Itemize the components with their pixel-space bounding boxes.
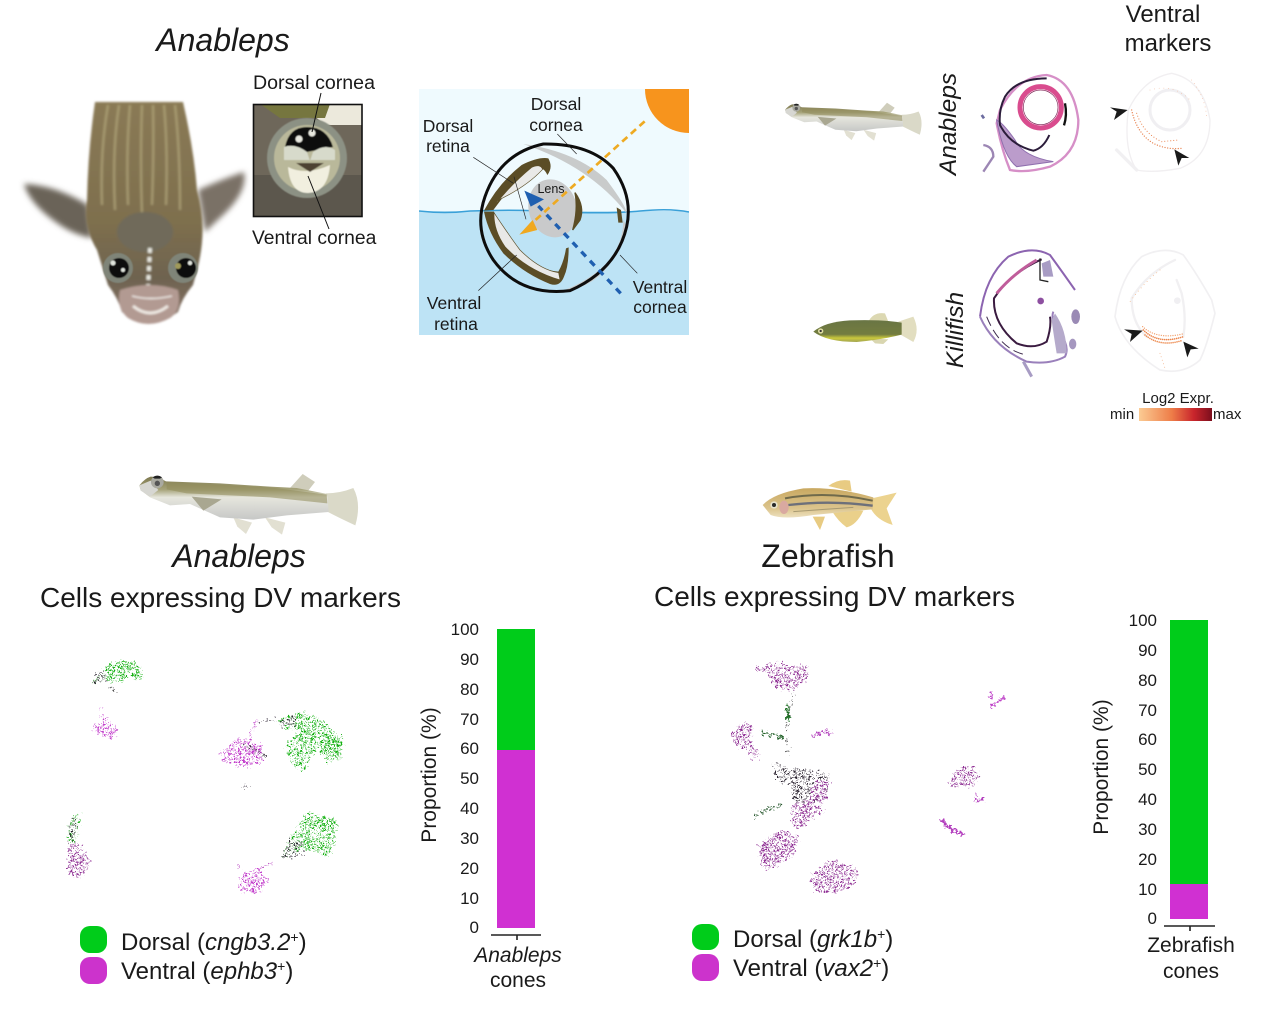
legend: Anableps dorsal and ventral: )	[285, 958, 293, 985]
legend: Anableps dorsal and ventral: Dorsal (cngb3.2	[121, 929, 290, 956]
chart: Zebrafish proportion stacked bar: 30	[1138, 820, 1157, 839]
x label: Anableps	[472, 944, 562, 967]
label: Dorsal cornea: Dorsal cornea	[253, 72, 375, 94]
legend: Anableps dorsal and ventral: +	[277, 958, 285, 974]
chart: Zebrafish proportion stacked bar: 60	[1138, 730, 1157, 749]
chart: Zebrafish proportion stacked bar: 90	[1138, 641, 1157, 660]
legend: Log2 expression colour bar: Log2 Expr.	[1142, 390, 1214, 407]
lens	[522, 174, 583, 243]
chart: Zebrafish proportion stacked bar: 0	[1148, 909, 1157, 928]
chart: Anableps proportion stacked bar: 10	[460, 889, 479, 908]
icon: arrowheads Anableps	[1110, 107, 1189, 166]
icon: killifish	[813, 313, 917, 344]
photo inset: eye close-up with cornea labels	[252, 72, 377, 249]
scatter: Anableps UMAP	[67, 660, 344, 893]
label: Ventral retina: Ventral	[427, 293, 481, 313]
chart: Zebrafish proportion stacked bar: 50	[1138, 760, 1157, 779]
legend: Zebrafish dorsal and ventral: Ventral (vax2	[733, 955, 873, 982]
chart: Anableps proportion stacked bar: 50	[460, 769, 479, 788]
chart: Anableps proportion stacked bar: 60	[460, 739, 479, 758]
ventral retina	[484, 212, 569, 285]
x label: cones	[490, 969, 546, 992]
heading: Cells expressing DV markers left: Cells expressing DV markers	[40, 582, 401, 613]
label: Anableps rotated: Anableps	[935, 73, 962, 177]
chart: Anableps proportion stacked bar	[418, 620, 562, 992]
label: Ventral retina: retina	[434, 314, 478, 334]
label: Ventral cornea diagram: Ventral	[633, 277, 687, 297]
title: Anableps top left: Anableps	[154, 22, 290, 58]
dorsal retina	[484, 158, 551, 211]
chart: Anableps proportion stacked bar: 90	[460, 650, 479, 669]
chart: Zebrafish proportion stacked bar	[1090, 611, 1235, 983]
label: Dorsal retina: retina	[426, 136, 470, 156]
section: Killifish histology	[980, 250, 1080, 377]
chart: Zebrafish proportion stacked bar: 20	[1138, 850, 1157, 869]
legend: Anableps dorsal and ventral: Ventral (ephb3	[121, 958, 277, 985]
chart: Zebrafish proportion stacked bar: 10	[1138, 880, 1157, 899]
heading: Cells expressing DV markers right: Cells expressing DV markers	[654, 581, 1015, 612]
heading: Ventral markers: Ventral	[1126, 1, 1200, 28]
x label: Zebrafish	[1147, 934, 1235, 957]
section: Anableps expression map	[1117, 73, 1210, 171]
label: Killifish rotated: Killifish	[942, 292, 969, 368]
legend: Zebrafish dorsal and ventral: )	[881, 955, 889, 982]
heading: Ventral markers: markers	[1125, 30, 1211, 57]
chart: Zebrafish proportion stacked bar: 70	[1138, 701, 1157, 720]
chart: Anableps proportion stacked bar: 100	[451, 620, 479, 639]
icon: fish pectoral fins	[24, 172, 245, 238]
legend: Anableps dorsal and ventral: +	[290, 929, 299, 945]
chart: Anableps proportion stacked bar: 40	[460, 799, 479, 818]
y axis title: Proportion (%)	[418, 707, 441, 843]
legend: Anableps dorsal and ventral: )	[299, 929, 307, 956]
section: Killifish expression map	[1115, 250, 1215, 371]
label: Ventral cornea diagram: cornea	[633, 297, 687, 317]
legend: Log2 expression colour bar: max	[1213, 406, 1242, 423]
sun ray	[530, 121, 645, 225]
cornea shading	[523, 144, 627, 213]
y axis title: Proportion (%)	[1090, 699, 1113, 835]
sclera	[481, 144, 628, 292]
chart: Anableps proportion stacked bar: 70	[460, 710, 479, 729]
heading: Zebrafish: Zebrafish	[761, 538, 895, 574]
legend: Zebrafish dorsal and ventral	[692, 924, 893, 982]
magenta bar segment	[497, 750, 535, 928]
photo: Anableps fish top view	[86, 102, 203, 324]
legend: Zebrafish dorsal and ventral: +	[873, 955, 881, 971]
chart: Anableps proportion stacked bar: 0	[470, 918, 479, 937]
leaders	[473, 134, 637, 291]
diagram: eye at water surface	[419, 89, 689, 335]
x label: cones	[1163, 960, 1219, 983]
water ray	[538, 206, 621, 293]
chart: Anableps proportion stacked bar: 80	[460, 680, 479, 699]
legend: Anableps dorsal and ventral	[80, 926, 307, 985]
iris pieces	[573, 193, 582, 230]
label: Lens: Lens	[537, 182, 565, 196]
icon: arrowheads Killifish	[1124, 329, 1199, 357]
legend: Log2 expression colour bar: min	[1110, 406, 1134, 423]
legend: Zebrafish dorsal and ventral: Dorsal (grk1b	[733, 926, 877, 953]
icon: zebrafish	[763, 480, 897, 530]
label: Ventral cornea: Ventral cornea	[252, 228, 377, 249]
section: Anableps histology	[982, 75, 1078, 172]
green bar segment	[497, 629, 535, 750]
chart: Zebrafish proportion stacked bar: 100	[1129, 611, 1157, 630]
icon: small Anableps fish	[785, 103, 922, 141]
heading: Anableps lower: Anableps	[170, 538, 306, 574]
chart: Anableps proportion stacked bar: 30	[460, 829, 479, 848]
chart: Anableps proportion stacked bar: 20	[460, 859, 479, 878]
icon: large Anableps fish	[139, 474, 358, 535]
icon: right eye of fish	[168, 253, 198, 283]
label: Dorsal cornea diagram: cornea	[529, 115, 583, 135]
legend: Log2 expression colour bar	[1110, 390, 1242, 423]
icon: left eye of fish	[103, 253, 133, 283]
green bar segment	[1170, 620, 1208, 884]
chart: Zebrafish proportion stacked bar: 80	[1138, 671, 1157, 690]
label: Dorsal cornea diagram: Dorsal	[531, 94, 581, 114]
scatter: Zebrafish UMAP	[731, 663, 1006, 893]
magenta bar segment	[1170, 884, 1208, 919]
legend: Zebrafish dorsal and ventral: +	[877, 926, 885, 942]
chart: Zebrafish proportion stacked bar: 40	[1138, 790, 1157, 809]
label: Dorsal retina: Dorsal	[423, 116, 473, 136]
legend: Zebrafish dorsal and ventral: )	[885, 926, 893, 953]
